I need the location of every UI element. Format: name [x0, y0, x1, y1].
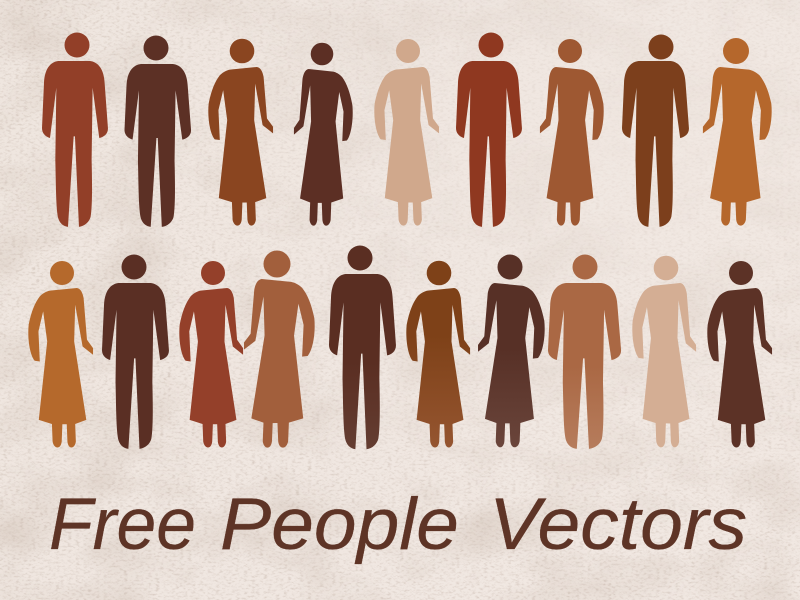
row 2 of people: [28, 246, 772, 449]
person 8: man, brown: [622, 34, 689, 227]
person 2: man, dark brown: [124, 36, 191, 227]
person 18: woman, light tan: [632, 256, 696, 447]
person 4: woman, dark brown: [294, 43, 353, 226]
title: People: [220, 484, 459, 565]
person 16: woman, dark grey brown: [478, 254, 545, 447]
person 1: man, rust: [42, 32, 108, 227]
person 19: woman, dark brown: [707, 261, 772, 448]
person 10: woman, ochre: [28, 261, 93, 448]
person 12: woman, rust: [179, 261, 243, 448]
person 14: man, dark brown: [329, 246, 396, 449]
person 5: woman, light tan: [374, 39, 439, 226]
row 1 of people: [42, 32, 772, 227]
person 11: man, dark brown: [102, 254, 169, 449]
person 6: man, red brown: [456, 32, 522, 227]
title: [49, 484, 747, 565]
person 17: man, tan: [548, 254, 621, 449]
person 13: woman, sienna: [244, 250, 315, 448]
person 15: woman, brown: [406, 261, 470, 448]
person 9: woman, ochre: [703, 38, 772, 226]
person 7: woman, sienna: [540, 39, 604, 226]
title: Free: [49, 484, 196, 565]
title: Vectors: [489, 484, 747, 565]
person 3: woman, brown: [208, 39, 273, 226]
